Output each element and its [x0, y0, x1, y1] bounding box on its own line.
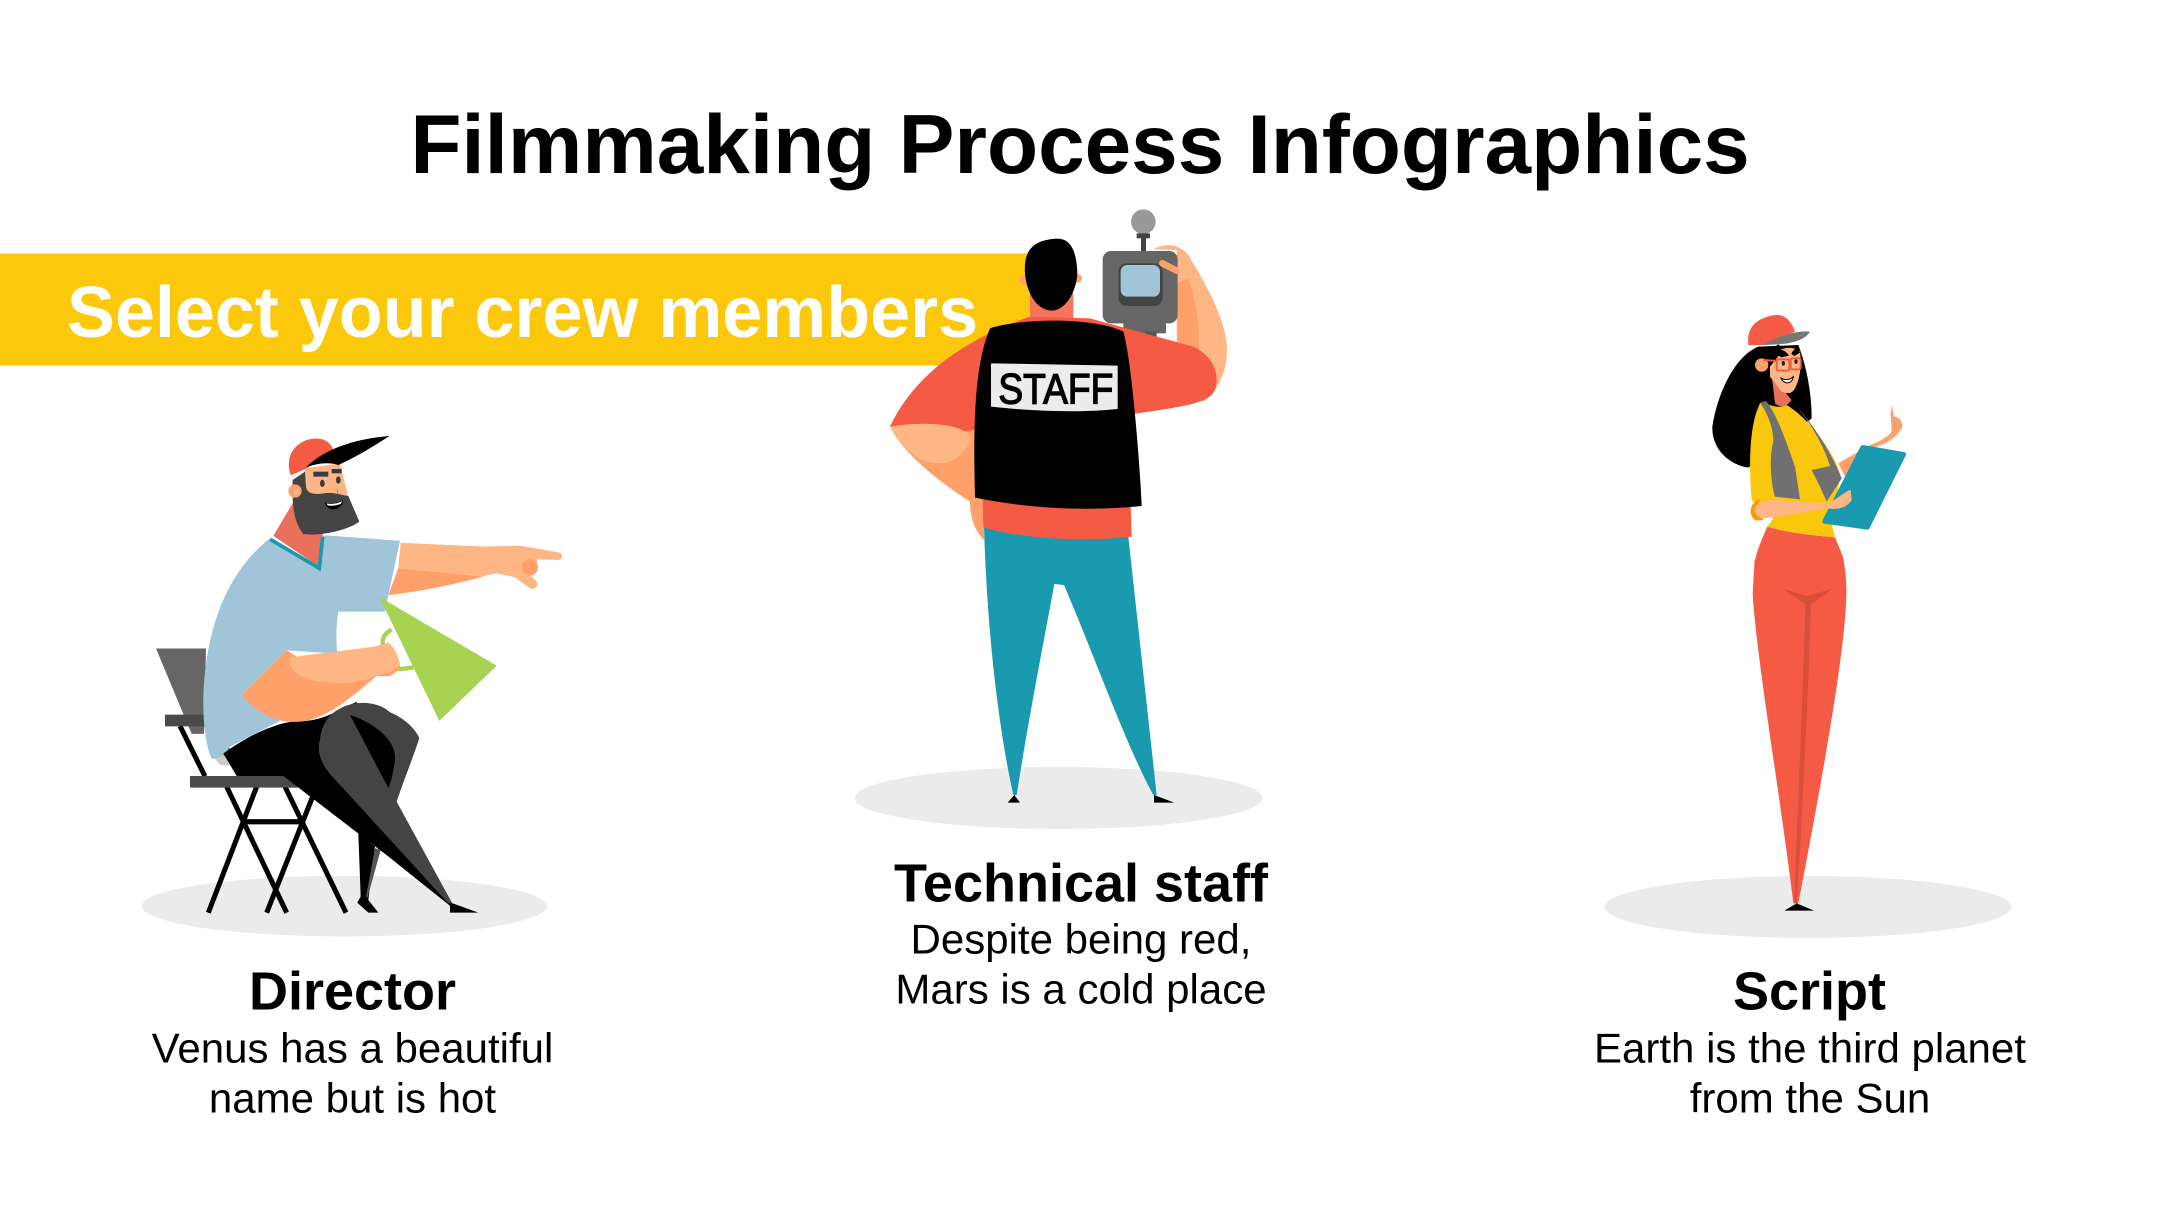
- caption: script: Script: [1733, 962, 1886, 1022]
- staff raised arm: [1153, 245, 1227, 402]
- staff badge: STAFF: [998, 366, 1113, 414]
- caption: technical staff: Technical staff: [894, 854, 1269, 914]
- illustration: director: [142, 436, 562, 936]
- caption: director: name but is hot: [209, 1074, 496, 1122]
- director chair: [156, 649, 346, 913]
- caption: technical staff: Despite being red,: [911, 916, 1251, 962]
- script shoe: [1784, 903, 1814, 911]
- caption: script: Earth is the third planet: [1594, 1024, 2026, 1072]
- script clipboard: [1825, 447, 1904, 527]
- staff head: [1019, 239, 1082, 322]
- caption: script: [1594, 962, 2026, 1122]
- title: Filmmaking Process Infographics: [410, 97, 1750, 191]
- caption: director: [152, 962, 553, 1122]
- caption: director: Director: [249, 962, 456, 1022]
- illustration: technical staff: [854, 209, 1262, 829]
- director neck and collar: [270, 502, 324, 568]
- staff left arm: [890, 424, 984, 540]
- director megaphone: [379, 597, 497, 721]
- script upper trousers: [1755, 527, 1844, 563]
- caption: script: from the Sun: [1690, 1074, 1930, 1122]
- staff red shirt: [890, 317, 1217, 539]
- caption: director: Venus has a beautiful: [152, 1024, 553, 1072]
- director shirt: [203, 535, 400, 759]
- caption: technical staff: [894, 854, 1269, 1012]
- caption: technical staff: Mars is a cold place: [895, 966, 1267, 1012]
- director pointing arm: [388, 543, 483, 595]
- director trousers: [223, 702, 478, 913]
- script vest: [1760, 401, 1842, 502]
- staff trousers: [984, 527, 1157, 795]
- script raised hand: [1838, 405, 1902, 477]
- script head: [1748, 315, 1810, 406]
- script hair: [1712, 345, 1812, 468]
- director head: [288, 436, 389, 535]
- script trouser seam: [1782, 588, 1833, 903]
- script trousers: [1753, 560, 1846, 903]
- illustration: script: [1604, 315, 2012, 938]
- script yellow shirt: [1750, 402, 1840, 537]
- staff vest: [974, 321, 1142, 509]
- script front arm: [1751, 490, 1852, 521]
- script ground shadow: [1604, 876, 2012, 938]
- banner: select your crew members: [0, 254, 1032, 366]
- director ground shadow: [142, 876, 547, 936]
- director holding arm: [242, 643, 400, 722]
- banner: select your crew members: Select your crew members: [67, 273, 978, 353]
- staff shoes: [1008, 795, 1174, 803]
- director hand: [480, 546, 562, 589]
- staff camera: [1103, 209, 1178, 338]
- staff ground shadow: [854, 767, 1262, 829]
